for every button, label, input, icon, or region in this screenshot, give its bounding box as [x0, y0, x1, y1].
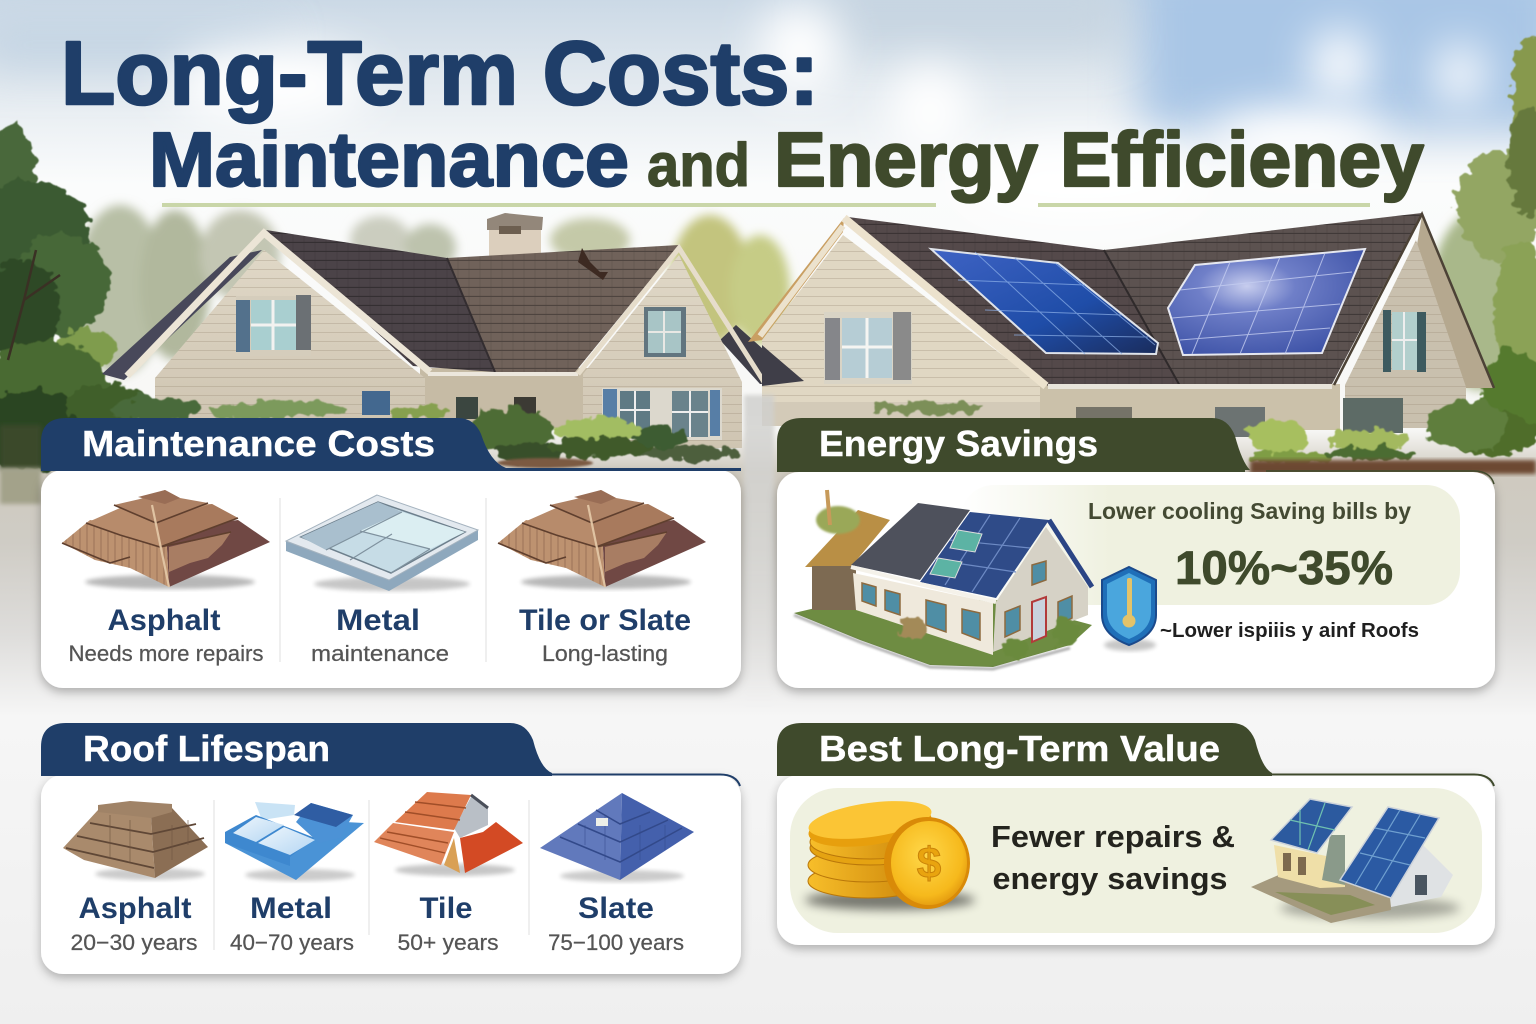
distant misty tree line — [75, 205, 1530, 390]
fog column between panels — [744, 395, 774, 705]
fascia right gable — [578, 248, 764, 382]
panel: energy savings — [777, 418, 1495, 688]
column dividers — [280, 498, 486, 662]
icon: tile roof — [374, 792, 523, 876]
fascia left gable — [127, 233, 430, 376]
icon: slate roof — [540, 793, 694, 882]
ground — [794, 600, 1092, 667]
gable soffit right — [1416, 216, 1494, 388]
dark main roof — [266, 230, 495, 372]
roof edge — [1049, 520, 1092, 587]
solar panel left — [931, 249, 1158, 354]
lower windows — [1076, 398, 1403, 437]
valley line — [1104, 250, 1180, 386]
label: metal: Metal — [336, 604, 420, 637]
right house with solar panels — [748, 213, 1536, 474]
gable window right — [644, 307, 686, 357]
lower windows right — [602, 388, 722, 440]
label: metal: Metal — [250, 892, 332, 925]
back dark roof right — [720, 325, 800, 384]
label: tile or slate: Tile or Slate — [519, 604, 691, 637]
highlight pill — [960, 485, 1460, 605]
door — [1032, 597, 1046, 642]
title line 2: Maintenance: Maintenance — [149, 117, 629, 203]
label: asphalt: Asphalt — [108, 604, 221, 637]
window right — [1383, 310, 1426, 372]
card — [777, 775, 1495, 945]
icon: tile or slate roof — [498, 490, 706, 589]
panel: roof lifespan — [41, 723, 741, 974]
icon: gold coins: $ — [917, 839, 941, 888]
gable wall left — [762, 235, 1046, 402]
valley line — [447, 258, 495, 372]
title line 2: Energy: Energy — [774, 117, 1038, 203]
gable wall left — [155, 250, 425, 420]
card — [41, 470, 741, 688]
icon: asphalt roof — [62, 490, 270, 589]
gable window left — [236, 295, 311, 356]
roof right — [1104, 213, 1422, 386]
gable right edges — [1334, 214, 1494, 388]
icon: solar house — [1251, 799, 1460, 923]
title line 2: and: and — [647, 131, 750, 199]
gutter — [428, 372, 578, 376]
heading: Maintenance Costs — [82, 423, 435, 464]
tree: left — [0, 125, 145, 470]
left house with shingle roof — [102, 213, 800, 468]
label: slate: Slate — [578, 892, 654, 925]
header tab — [777, 418, 1250, 472]
icon: metal roof — [286, 495, 478, 591]
title underline — [162, 203, 1370, 207]
lower wall and planter — [762, 402, 1046, 426]
lifespan: asphalt: 20−30 years — [70, 930, 198, 955]
mulch bed — [497, 458, 593, 468]
card — [777, 472, 1495, 688]
header tab — [41, 418, 741, 471]
shrubs in front of left house — [110, 397, 740, 461]
note: needs more repairs: Needs more repairs — [68, 641, 264, 666]
header tab — [41, 723, 552, 776]
gable wall right — [1345, 240, 1466, 428]
text: fewer repairs: Fewer repairs & — [991, 819, 1235, 854]
highlight pill — [790, 788, 1482, 933]
lifespan: slate: 75−100 years — [548, 930, 684, 955]
card — [41, 775, 741, 974]
gable soffit left — [748, 218, 844, 342]
label: asphalt: Asphalt — [78, 892, 192, 925]
mulch bed right — [1250, 460, 1536, 474]
heading: Energy Savings — [819, 423, 1098, 464]
title line 1: Long-Term Costs: — [61, 24, 819, 124]
lower windows middle — [362, 391, 536, 419]
chimney — [487, 213, 543, 268]
icon: asphalt roof — [63, 801, 208, 880]
windows — [862, 561, 1072, 640]
window left — [824, 312, 912, 384]
fascia left gable lower — [760, 226, 843, 336]
gutter — [1048, 384, 1332, 389]
lifespan: tile: 50+ years — [398, 930, 498, 955]
back dark roof left — [102, 250, 262, 380]
brown roof — [447, 245, 679, 372]
top edge line — [550, 774, 740, 786]
title — [61, 24, 1424, 203]
gable wall — [993, 527, 1088, 652]
gray roof — [851, 503, 970, 580]
porch wall — [420, 368, 595, 428]
label: tile: Tile — [420, 892, 472, 925]
text: lower cooling: Lower cooling Saving bills by — [1088, 498, 1411, 524]
tree: right — [1450, 35, 1536, 457]
header tab — [777, 723, 1272, 776]
fascia left gable — [844, 218, 1046, 386]
heading: Best Long-Term Value — [819, 728, 1220, 769]
icon: house with solar roof — [794, 490, 1092, 669]
panel: maintenance costs — [41, 418, 741, 688]
blue roof — [920, 512, 1049, 598]
back dark roof overlapping right house — [762, 345, 804, 386]
stat: 10%~35%: 10%~35% — [1175, 541, 1393, 594]
heading: Roof Lifespan — [83, 728, 330, 769]
text: energy savings: energy savings — [992, 861, 1228, 896]
note: long-lasting: Long-lasting — [542, 641, 668, 666]
porch wall — [1040, 384, 1340, 430]
gable wall right — [583, 255, 742, 448]
icon: metal roof — [225, 802, 364, 881]
panel: best long-term value — [777, 723, 1495, 945]
text: lower roofs: ~Lower ispiiis y ainf Roofs — [1160, 620, 1419, 642]
lifespan: metal: 40−70 years — [230, 930, 354, 955]
note: maintenance: maintenance — [311, 641, 449, 666]
icon: gold coins — [805, 795, 975, 910]
top edge line — [1270, 774, 1494, 786]
ground left edge — [0, 425, 41, 504]
icon: thermometer shield — [1102, 567, 1156, 651]
roof left — [848, 217, 1180, 386]
column dividers — [214, 800, 529, 950]
bushes — [899, 614, 1079, 658]
roof vent — [578, 248, 608, 280]
shadow under lawn — [794, 615, 1070, 669]
top edge line — [1266, 471, 1494, 484]
shrubs right house — [870, 400, 1506, 465]
skylights — [950, 530, 982, 552]
thatched shed — [805, 510, 890, 567]
title line 2: Efficieney: Efficieney — [1060, 117, 1424, 203]
front wall — [853, 573, 993, 655]
solar panel right — [1168, 249, 1365, 355]
